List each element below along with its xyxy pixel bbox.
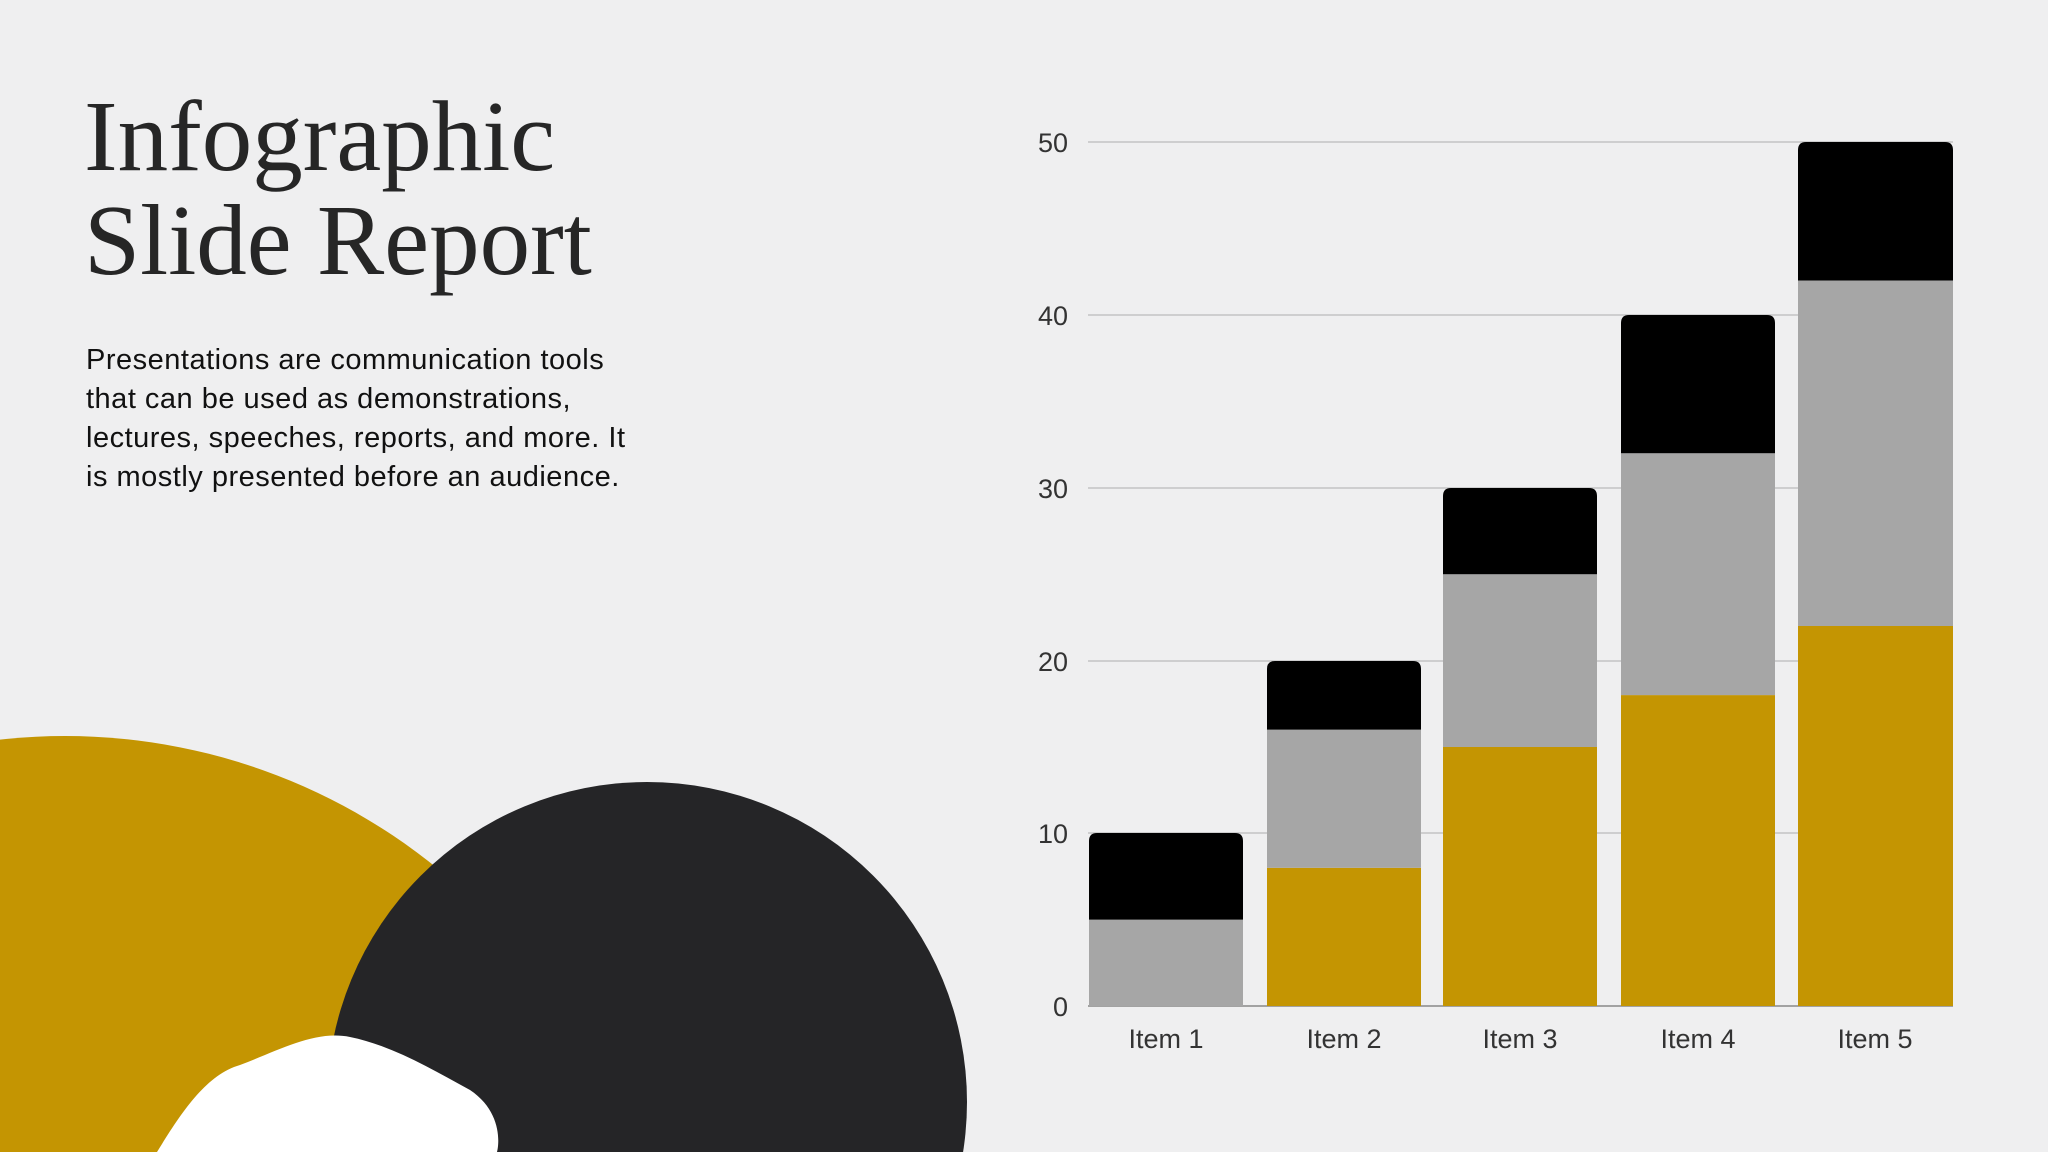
x-axis labels: Item 5 xyxy=(1837,1024,1913,1054)
shape: gold circle xyxy=(0,736,432,1152)
title xyxy=(84,80,592,296)
y-axis labels: 0 xyxy=(1053,992,1068,1022)
x-axis labels xyxy=(1128,1024,1913,1054)
y-axis labels: 20 xyxy=(1038,647,1068,677)
text block: description xyxy=(86,344,626,493)
x-axis labels: Item 3 xyxy=(1482,1024,1558,1054)
x-axis labels: Item 4 xyxy=(1660,1024,1736,1054)
shape: white blob xyxy=(157,1036,498,1152)
x-axis labels: Item 2 xyxy=(1306,1024,1382,1054)
text block: description: Presentations are communication tools xyxy=(86,344,604,376)
title: Slide Report xyxy=(84,184,592,296)
x-axis labels: Item 1 xyxy=(1128,1024,1204,1054)
text block: description: lectures, speeches, reports, and more. It xyxy=(86,422,626,454)
y-axis labels xyxy=(1038,128,1068,1022)
bar: Item 2 xyxy=(1267,661,1421,1006)
bar: Item 1 xyxy=(1089,833,1243,1006)
bar: Item 3 xyxy=(1443,488,1597,1006)
y-axis labels: 40 xyxy=(1038,301,1068,331)
decorative shapes xyxy=(0,736,967,1152)
y-axis labels: 30 xyxy=(1038,474,1068,504)
bar: Item 4 xyxy=(1621,315,1775,1006)
bar: Item 5 xyxy=(1798,142,1953,1006)
y-axis labels: 50 xyxy=(1038,128,1068,158)
text block: description: that can be used as demonstrations, xyxy=(86,383,571,415)
text block: description: is mostly presented before an audience. xyxy=(86,461,620,493)
title: Infographic xyxy=(84,80,555,192)
y-axis labels: 10 xyxy=(1038,819,1068,849)
shape: dark circle xyxy=(327,782,967,1152)
